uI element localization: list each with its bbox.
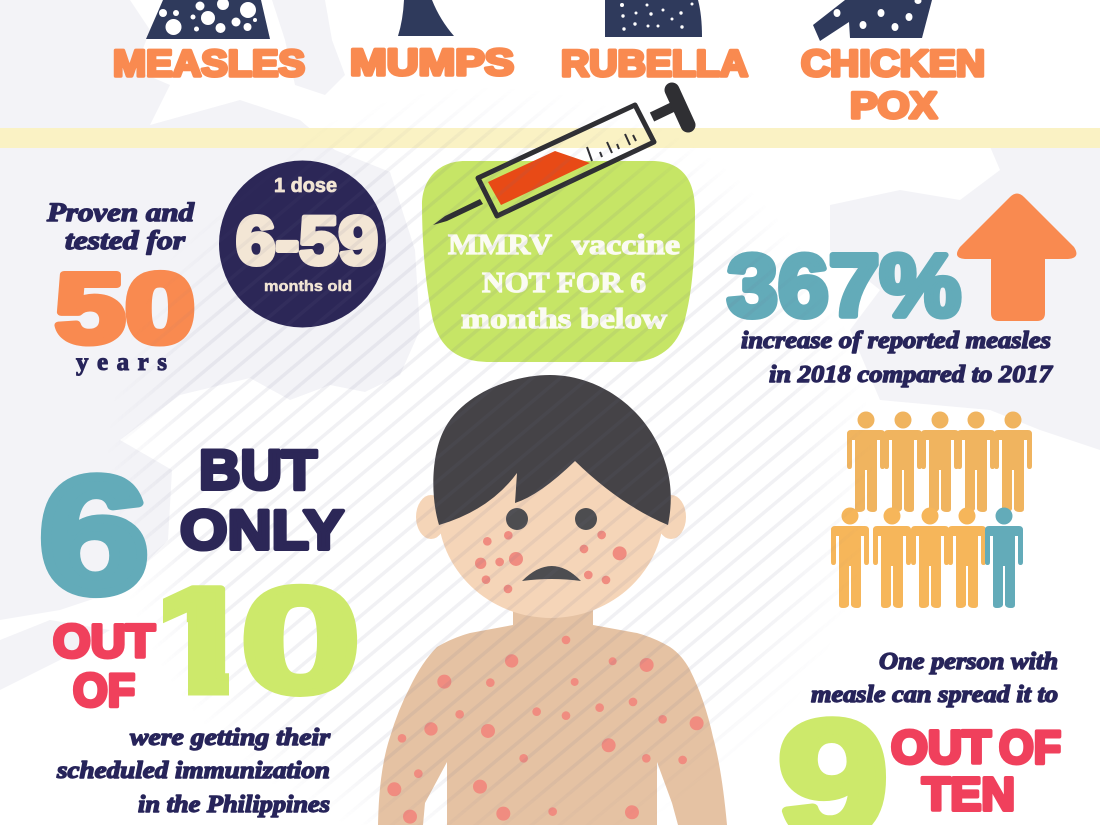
spread caption: One person with — [879, 649, 1058, 675]
out of ten: OUT — [891, 721, 991, 773]
number 10: 0 — [240, 556, 361, 724]
mouth — [522, 566, 581, 581]
yellow band — [0, 128, 1100, 148]
icon: syringe — [433, 90, 688, 225]
number 50: 50 — [55, 253, 195, 363]
spread caption — [811, 649, 1058, 708]
1 dose: 1 dose — [274, 175, 337, 197]
out of ten — [891, 721, 1061, 820]
pictogram: nine of ten people — [831, 412, 1032, 608]
367 percent stat — [727, 194, 1076, 388]
out of ten: OF — [999, 721, 1061, 773]
hair — [433, 375, 671, 525]
out of: OF — [73, 664, 135, 716]
label: mumps: MUMPS — [350, 42, 514, 83]
six out of ten stat — [39, 438, 361, 818]
but only: ONLY — [180, 498, 344, 561]
number 367%: 367% — [727, 236, 961, 335]
vaccine text: NOT FOR 6 — [482, 267, 646, 299]
rash spots — [387, 531, 704, 824]
icon: measles shirt — [146, 0, 270, 39]
proven stat block — [46, 198, 195, 376]
body — [378, 600, 727, 825]
number 10 — [163, 584, 358, 697]
out of ten: TEN — [922, 768, 1015, 820]
proven and tested text — [46, 198, 195, 255]
years: years — [76, 349, 167, 376]
immunization caption — [56, 725, 331, 818]
label: chicken: CHICKEN — [801, 43, 985, 84]
number 6: 6 — [39, 443, 149, 627]
immunization caption: were getting their — [130, 725, 331, 751]
icon: up arrow — [957, 194, 1076, 321]
increase caption — [741, 328, 1053, 388]
green vaccine panel — [422, 161, 695, 362]
label: measles: MEASLES — [113, 43, 305, 84]
proven and tested text: Proven and — [46, 198, 195, 227]
face — [438, 402, 664, 618]
out of — [53, 615, 155, 716]
immunization caption: in the Philippines — [138, 792, 330, 818]
nine out of ten stat — [778, 649, 1061, 825]
6-59: 6-59 — [236, 203, 378, 279]
icon: chicken pox shirt — [813, 0, 932, 41]
boy with measles rash — [378, 375, 727, 825]
vaccine text: vaccine — [572, 229, 680, 261]
label: rubella: RUBELLA — [561, 43, 748, 84]
but only — [180, 438, 344, 561]
label: pox: POX — [850, 85, 937, 126]
vaccine text: months below — [461, 303, 667, 335]
months old: months old — [264, 278, 352, 295]
icon: rubella shirt — [605, 0, 702, 37]
out of: OUT — [53, 615, 155, 667]
increase caption: in 2018 compared to 2017 — [769, 362, 1053, 388]
icon: mumps — [398, 0, 454, 36]
eyes — [506, 508, 597, 530]
dose circle — [219, 160, 386, 328]
proven and tested text: tested for — [65, 226, 186, 255]
immunization caption: scheduled immunization — [56, 758, 330, 784]
ears — [416, 495, 686, 539]
number 10: 1 — [143, 556, 259, 724]
vaccine text — [448, 229, 680, 335]
vaccine text: MMRV — [448, 229, 552, 261]
disease labels — [113, 42, 985, 126]
but only: BUT — [199, 438, 317, 501]
increase caption: increase of reported measles — [741, 328, 1051, 354]
spread caption: measle can spread it to — [811, 682, 1058, 708]
